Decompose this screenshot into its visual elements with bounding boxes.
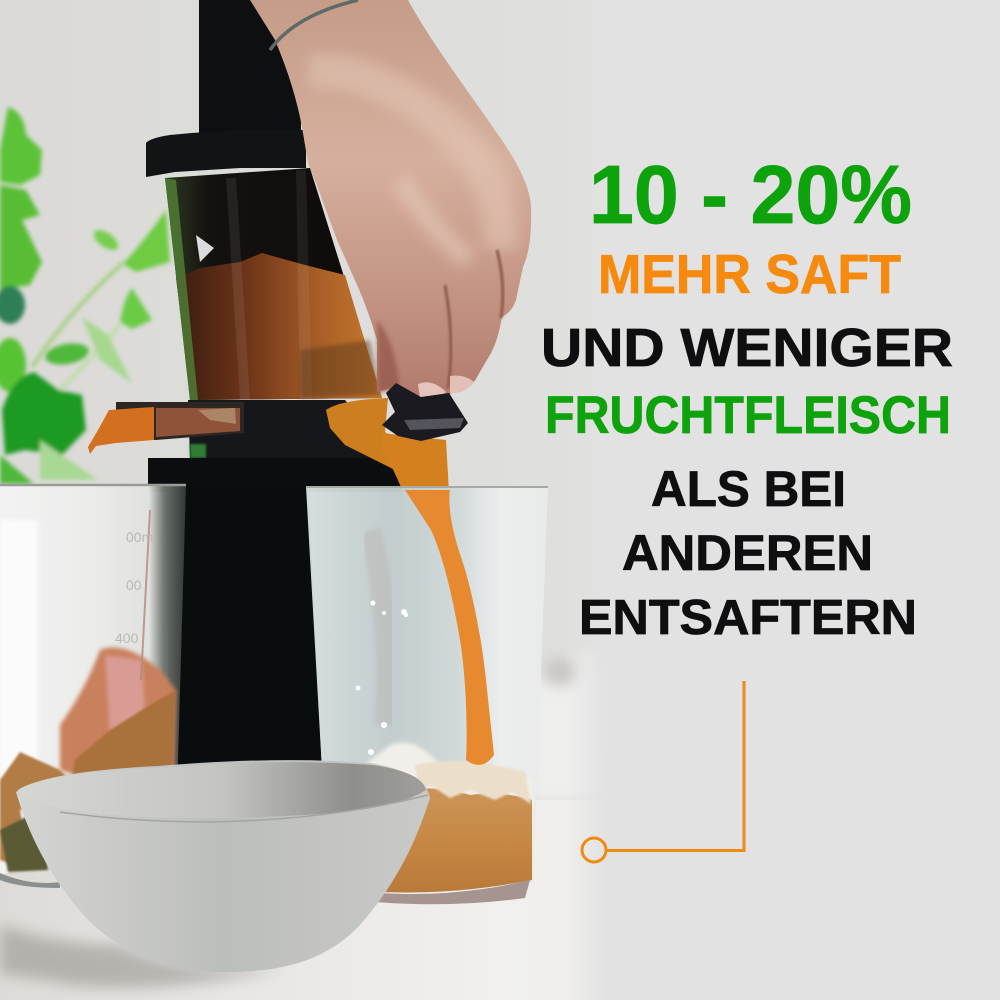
- text: ANDEREN: ANDEREN: [622, 525, 873, 581]
- text: ALS BEI: ALS BEI: [651, 461, 846, 517]
- headline: 10 - 20%: 10 - 20%: [589, 148, 912, 241]
- juice stream below spout: [381, 433, 449, 492]
- headline: MEHR SAFT: MEHR SAFT: [598, 243, 901, 305]
- table surface: [0, 800, 1000, 1000]
- green reflection under collar: [190, 444, 206, 458]
- water droplets: [356, 600, 408, 755]
- juicer lid: [146, 130, 306, 177]
- left glass with pulp: 400: [115, 630, 139, 646]
- juicer feed chute: [199, 0, 301, 135]
- juicer body: [165, 486, 322, 770]
- foam on juice: [415, 761, 531, 804]
- text: ENTSAFTERN: ENTSAFTERN: [579, 591, 917, 645]
- spout cap: [382, 383, 468, 441]
- plant: blurred green leaves: [0, 107, 170, 484]
- juicer collar: [188, 400, 395, 458]
- bowl shadow on table: [0, 925, 290, 988]
- blurred white object behind glass: [530, 650, 606, 800]
- bowl: [16, 760, 430, 972]
- hand: [250, 0, 531, 400]
- glass foot: [376, 880, 530, 904]
- text: FRUCHTFLEISCH: FRUCHTFLEISCH: [545, 386, 951, 445]
- left glass with pulp: [0, 485, 186, 888]
- pulp outlet with orange pulp: [88, 402, 244, 454]
- text: UND WENIGER: UND WENIGER: [541, 318, 953, 378]
- juice in right glass: [385, 788, 532, 892]
- juicer chamber with pulp: [165, 168, 382, 400]
- juice stream: [405, 490, 494, 765]
- spout with juice: [326, 398, 440, 495]
- left glass with pulp: 00ml: [126, 529, 156, 545]
- wristband: [270, 0, 358, 50]
- orange connector line with circle: [582, 681, 744, 862]
- right glass: [306, 487, 548, 893]
- photo fade to grey panel: [565, 0, 607, 1000]
- juicer base: [148, 458, 412, 492]
- left glass with pulp: 00: [126, 577, 142, 593]
